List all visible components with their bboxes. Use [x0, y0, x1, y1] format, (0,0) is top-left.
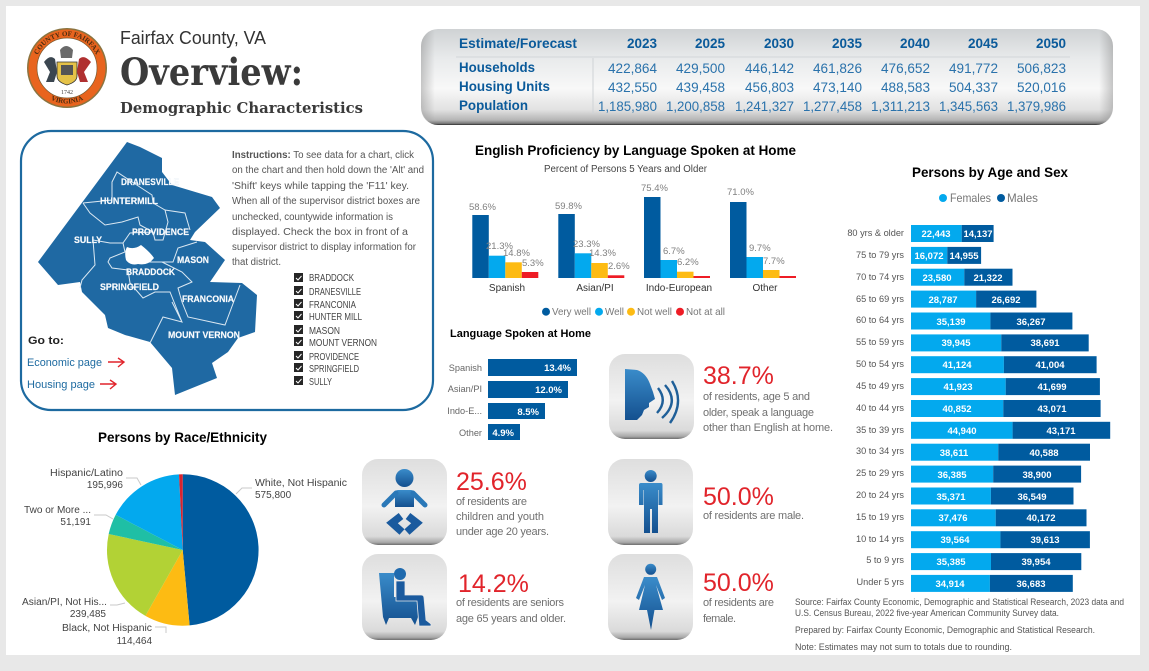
panel: estimate and forecast table: 1,277,458 — [803, 98, 862, 114]
stat: speak another language — [609, 354, 833, 439]
heading: English proficiency — [475, 142, 796, 175]
panel: estimate and forecast table: 1,200,858 — [666, 98, 725, 114]
icon: woman — [608, 554, 693, 640]
stat: male: 50.0% — [703, 483, 774, 511]
chart: language spoken at home bars: 4.9% — [492, 428, 515, 439]
panel: estimate and forecast table: 2030 — [764, 36, 794, 51]
map of supervisor districts: MOUNT VERNON — [168, 330, 240, 340]
map of supervisor districts: DRANESVILLE — [121, 177, 179, 187]
chart: age and sex: 38,900 — [1022, 470, 1052, 481]
chart: race and ethnicity pie: 51,191 — [60, 517, 91, 528]
panel: estimate and forecast table: Housing Units — [459, 79, 550, 94]
chart: age and sex: 10 to 14 yrs — [856, 534, 904, 544]
chart: age and sex: 50 to 54 yrs — [856, 359, 904, 369]
chart: English proficiency clustered bars: 23.3% — [573, 239, 600, 250]
navigation links: Economic page — [27, 357, 102, 369]
stat: male: of residents are male. — [703, 510, 804, 522]
chart: age and sex: 38,611 — [940, 448, 969, 459]
chart: English proficiency clustered bars: 2.6% — [608, 261, 630, 272]
panel: estimate and forecast table: Estimate/Forecast — [459, 36, 577, 51]
chart: race and ethnicity pie — [22, 468, 347, 647]
chart: age and sex: 15 to 19 yrs — [856, 512, 904, 522]
panel: estimate and forecast table: 473,140 — [813, 79, 862, 95]
chart: race and ethnicity pie: Two or More ... — [24, 505, 91, 516]
panel: estimate and forecast table: 488,583 — [881, 79, 930, 95]
chart legend: Very well — [552, 306, 591, 318]
chart: language spoken at home bars: 13.4% — [544, 363, 572, 374]
chart: age and sex: 55 to 59 yrs — [856, 337, 904, 347]
chart: English proficiency clustered bars: 6.2% — [677, 257, 699, 268]
panel: estimate and forecast table: 2040 — [900, 36, 930, 51]
chart: age and sex: 14,955 — [949, 251, 979, 262]
chart: English proficiency clustered bars: 5.3% — [522, 258, 544, 269]
navigation links: Go to: — [28, 335, 64, 347]
chart: English proficiency clustered bars: 75.4% — [641, 183, 668, 194]
chart: age and sex: 37,476 — [938, 513, 968, 524]
instructions text: Instructions: To see data for a chart, click — [232, 150, 415, 161]
panel: estimate and forecast table: 439,458 — [676, 79, 725, 95]
title block: Fairfax County, VA — [120, 28, 266, 48]
instructions text: that district. — [232, 257, 281, 268]
chart: race and ethnicity pie: White, Not Hispanic — [255, 478, 347, 489]
icon: seated senior — [362, 554, 447, 640]
panel: estimate and forecast table: 476,652 — [881, 60, 930, 76]
chart: age and sex: 14,137 — [963, 229, 993, 240]
chart: age and sex: 70 to 74 yrs — [856, 272, 904, 282]
stat: speak another language: older, speak a language — [703, 407, 814, 419]
panel: estimate and forecast table: Households — [459, 60, 535, 75]
stat: speak another language: 38.7% — [703, 362, 774, 390]
chart: age and sex: 35 to 39 yrs — [856, 425, 904, 435]
panel: map and instructions — [21, 131, 433, 410]
stat: female: of residents are — [703, 597, 774, 609]
chart: age and sex: 40,172 — [1026, 513, 1056, 524]
chart: age and sex: 21,322 — [973, 273, 1003, 284]
panel: estimate and forecast table: 2050 — [1036, 36, 1066, 51]
chart: age and sex: 43,171 — [1046, 426, 1076, 437]
supervisor district checkboxes: MOUNT VERNON — [309, 338, 377, 349]
icon: county seal: 1742 — [61, 90, 73, 96]
panel: estimate and forecast table: 422,864 — [608, 60, 657, 76]
icon: speaking head — [609, 354, 694, 439]
map of supervisor districts: PROVIDENCE — [132, 227, 189, 237]
panel: estimate and forecast table: 429,500 — [676, 60, 725, 76]
chart: age and sex: 16,072 — [914, 251, 944, 262]
instructions text: supervisor district to display information for — [232, 242, 417, 253]
stat: speak another language: other than English at home. — [703, 422, 833, 434]
panel: estimate and forecast table: Population — [459, 98, 528, 113]
chart: age and sex: 43,071 — [1037, 404, 1067, 415]
age chart legend: Males — [1007, 191, 1038, 205]
heading: English proficiency: Percent of Persons 5 Years and Older — [544, 164, 708, 175]
chart: age and sex: 36,267 — [1016, 317, 1046, 328]
icon: county seal: VIRGINIA — [52, 96, 84, 104]
heading: race and ethnicity: Persons by Race/Ethnicity — [98, 429, 267, 445]
chart: English proficiency clustered bars: Spanish — [489, 283, 525, 294]
age chart legend — [939, 191, 1038, 205]
chart legend: Not well — [637, 306, 672, 318]
heading: language spoken at home: Language Spoken at Home — [450, 328, 591, 340]
stat: female: 50.0% — [703, 569, 774, 597]
chart: language spoken at home bars: Asian/PI — [448, 384, 482, 394]
panel: estimate and forecast table: 491,772 — [949, 60, 998, 76]
chart: race and ethnicity pie: Asian/PI, Not His... — [22, 597, 107, 608]
chart: language spoken at home bars: Indo-E... — [447, 406, 482, 416]
chart: race and ethnicity pie: 239,485 — [70, 609, 106, 620]
chart: age and sex: 41,923 — [943, 382, 973, 393]
source notes — [795, 597, 1124, 652]
chart: English proficiency clustered bars: 14.3% — [589, 248, 616, 259]
chart: English proficiency clustered bars: 58.6% — [469, 202, 496, 213]
chart: age and sex: 35,371 — [936, 492, 966, 503]
panel: estimate and forecast table: 2025 — [695, 36, 725, 51]
chart: age and sex: 36,683 — [1016, 579, 1046, 590]
icon: baby — [362, 459, 447, 545]
chart: age and sex: 40,852 — [942, 404, 972, 415]
chart: age and sex: 39,954 — [1021, 557, 1051, 568]
chart: age and sex: 36,549 — [1017, 492, 1047, 503]
chart: age and sex: 75 to 79 yrs — [856, 250, 904, 260]
source notes: Source: Fairfax County Economic, Demographic and Statistical Research, 2023 data and — [795, 597, 1124, 607]
chart: age and sex: 20 to 24 yrs — [856, 490, 904, 500]
panel: estimate and forecast table: 1,241,327 — [735, 98, 794, 114]
stat: seniors: of residents are seniors — [456, 597, 564, 609]
title block: Overview: — [120, 50, 303, 94]
supervisor district checkboxes: HUNTER MILL — [309, 312, 362, 323]
map of supervisor districts: FRANCONIA — [182, 294, 234, 304]
chart: English proficiency clustered bars: 21.3% — [486, 241, 513, 252]
stat: children and youth: children and youth — [456, 511, 544, 523]
chart: language spoken at home bars: 8.5% — [517, 407, 540, 418]
chart: English proficiency clustered bars: Indo-European — [646, 283, 712, 294]
title block: Demographic Characteristics — [120, 99, 363, 117]
age chart legend: Females — [950, 191, 991, 205]
chart: English proficiency clustered bars: 59.8% — [555, 201, 582, 212]
chart: age and sex: 41,699 — [1037, 382, 1067, 393]
instructions text: When all of the supervisor district boxes are — [232, 196, 420, 207]
supervisor district checkboxes: SPRINGFIELD — [309, 364, 359, 375]
chart: race and ethnicity pie: 575,800 — [255, 490, 292, 501]
supervisor district checkboxes: PROVIDENCE — [309, 352, 359, 363]
panel: estimate and forecast table: 456,803 — [745, 79, 794, 95]
chart: age and sex: Persons by Age and Sex — [912, 164, 1068, 180]
chart: English proficiency clustered bars: Asian/PI — [576, 283, 614, 294]
chart: age and sex — [847, 164, 1110, 592]
instructions text: unchecked, countywide information is — [232, 212, 393, 223]
map of supervisor districts: HUNTERMILL — [100, 196, 158, 206]
stat: male — [608, 459, 804, 545]
supervisor district checkboxes: DRANESVILLE — [309, 287, 361, 298]
chart: race and ethnicity pie: 114,464 — [117, 636, 152, 647]
panel: estimate and forecast table: 1,311,213 — [871, 98, 930, 114]
chart: English proficiency clustered bars: 9.7% — [749, 243, 771, 254]
chart: age and sex: 39,945 — [941, 338, 971, 349]
supervisor district checkboxes: FRANCONIA — [309, 300, 356, 311]
navigation links: Housing page — [27, 379, 95, 391]
chart: race and ethnicity pie: 195,996 — [87, 480, 123, 491]
panel: estimate and forecast table — [421, 29, 1113, 125]
stat: speak another language: of residents, age 5 and — [703, 391, 810, 403]
chart: English proficiency clustered bars: 14.8% — [503, 248, 530, 259]
supervisor district checkboxes: SULLY — [309, 377, 332, 388]
chart: age and sex: Under 5 yrs — [856, 577, 904, 587]
instructions text: 'Shift' keys while tapping the 'F11' key. — [232, 181, 409, 192]
chart: age and sex: 60 to 64 yrs — [856, 315, 904, 325]
panel: estimate and forecast table: 2045 — [968, 36, 998, 51]
panel: estimate and forecast table: 2023 — [627, 36, 657, 51]
chart legend: Not at all — [686, 306, 725, 318]
chart: age and sex: 22,443 — [921, 229, 951, 240]
panel: estimate and forecast table: 2035 — [832, 36, 862, 51]
chart: age and sex: 39,613 — [1030, 535, 1060, 546]
chart: age and sex: 45 to 49 yrs — [856, 381, 904, 391]
chart: age and sex: 25 to 29 yrs — [856, 468, 904, 478]
stat: children and youth: under age 20 years. — [456, 526, 549, 538]
chart: language spoken at home bars: Other — [459, 428, 482, 438]
chart: age and sex: 40 to 44 yrs — [856, 403, 904, 413]
panel: estimate and forecast table: 446,142 — [745, 60, 794, 76]
map of supervisor districts — [38, 142, 257, 395]
chart: English proficiency clustered bars: Other — [752, 283, 778, 294]
chart: age and sex: 40,588 — [1029, 448, 1059, 459]
heading: English proficiency: English Proficiency by Language Spoken at Home — [475, 142, 796, 158]
chart: English proficiency clustered bars: 6.7% — [663, 246, 685, 257]
stat: female: female. — [703, 613, 736, 625]
chart: English proficiency clustered bars: 7.7% — [763, 256, 785, 267]
source notes: Prepared by: Fairfax County Economic, Demographic and Statistical Research. — [795, 625, 1095, 635]
chart: race and ethnicity pie: Black, Not Hispanic — [62, 623, 152, 634]
supervisor district checkboxes: BRADDOCK — [309, 273, 354, 284]
stat: children and youth — [362, 459, 549, 545]
panel: estimate and forecast table: 1,345,563 — [939, 98, 998, 114]
chart: age and sex: 30 to 34 yrs — [856, 446, 904, 456]
navigation links — [27, 335, 124, 391]
icon: county seal — [27, 28, 107, 108]
chart: age and sex: 34,914 — [935, 579, 965, 590]
instructions text — [232, 150, 424, 268]
chart: age and sex: 44,940 — [947, 426, 977, 437]
instructions text: displayed. Check the box in front of a — [232, 227, 408, 238]
chart: age and sex: 36,385 — [937, 470, 967, 481]
map of supervisor districts: BRADDOCK — [126, 267, 175, 277]
stat: seniors: 14.2% — [458, 570, 529, 598]
source notes: Note: Estimates may not sum to totals due to rounding. — [795, 642, 1012, 652]
chart: age and sex: 80 yrs & older — [847, 228, 904, 238]
panel: estimate and forecast table: 1,379,986 — [1007, 98, 1066, 114]
icon: man — [608, 459, 693, 545]
map of supervisor districts: SULLY — [74, 235, 102, 245]
panel: estimate and forecast table: 506,823 — [1017, 60, 1066, 76]
panel: estimate and forecast table: 504,337 — [949, 79, 998, 95]
stat: children and youth: 25.6% — [456, 468, 527, 496]
chart: English proficiency clustered bars: 71.0% — [727, 187, 754, 198]
stat: children and youth: of residents are — [456, 496, 527, 508]
source notes: U.S. Census Bureau, 2022 five-year American Community Survey data. — [795, 608, 1059, 618]
map of supervisor districts: MASON — [177, 255, 209, 265]
map of supervisor districts: SPRINGFIELD — [100, 282, 159, 292]
panel: estimate and forecast table: 520,016 — [1017, 79, 1066, 95]
chart: age and sex: 41,124 — [942, 360, 972, 371]
chart: age and sex: 5 to 9 yrs — [866, 555, 904, 565]
panel: estimate and forecast table: 432,550 — [608, 79, 657, 95]
chart: English proficiency clustered bars — [469, 183, 796, 318]
chart: age and sex: 28,787 — [928, 295, 958, 306]
chart: age and sex: 35,139 — [936, 317, 966, 328]
chart: language spoken at home bars: 12.0% — [535, 385, 563, 396]
chart: race and ethnicity pie: Hispanic/Latino — [50, 468, 123, 479]
chart: age and sex: 23,580 — [922, 273, 952, 284]
chart legend: Well — [605, 306, 624, 318]
icon: county seal: COUNTY OF FAIRFAX — [34, 31, 100, 55]
chart: age and sex: 65 to 69 yrs — [856, 294, 904, 304]
panel: estimate and forecast table: 1,185,980 — [598, 98, 657, 114]
title block — [120, 28, 363, 117]
instructions text: on the chart and then hold down the 'Alt' and — [232, 165, 424, 176]
chart: language spoken at home bars — [447, 359, 577, 440]
supervisor district checkboxes — [294, 273, 377, 388]
stat: female — [608, 554, 774, 640]
supervisor district checkboxes: MASON — [309, 326, 340, 337]
stat: seniors: age 65 years and older. — [456, 613, 566, 625]
chart legend — [542, 306, 725, 318]
chart: age and sex: 38,691 — [1030, 338, 1060, 349]
chart: age and sex: 26,692 — [991, 295, 1021, 306]
chart: age and sex: 39,564 — [940, 535, 970, 546]
chart: age and sex: 41,004 — [1035, 360, 1065, 371]
stat: seniors — [362, 554, 566, 640]
panel: estimate and forecast table: 461,826 — [813, 60, 862, 76]
chart: age and sex: 35,385 — [936, 557, 966, 568]
chart: language spoken at home bars: Spanish — [449, 363, 482, 373]
